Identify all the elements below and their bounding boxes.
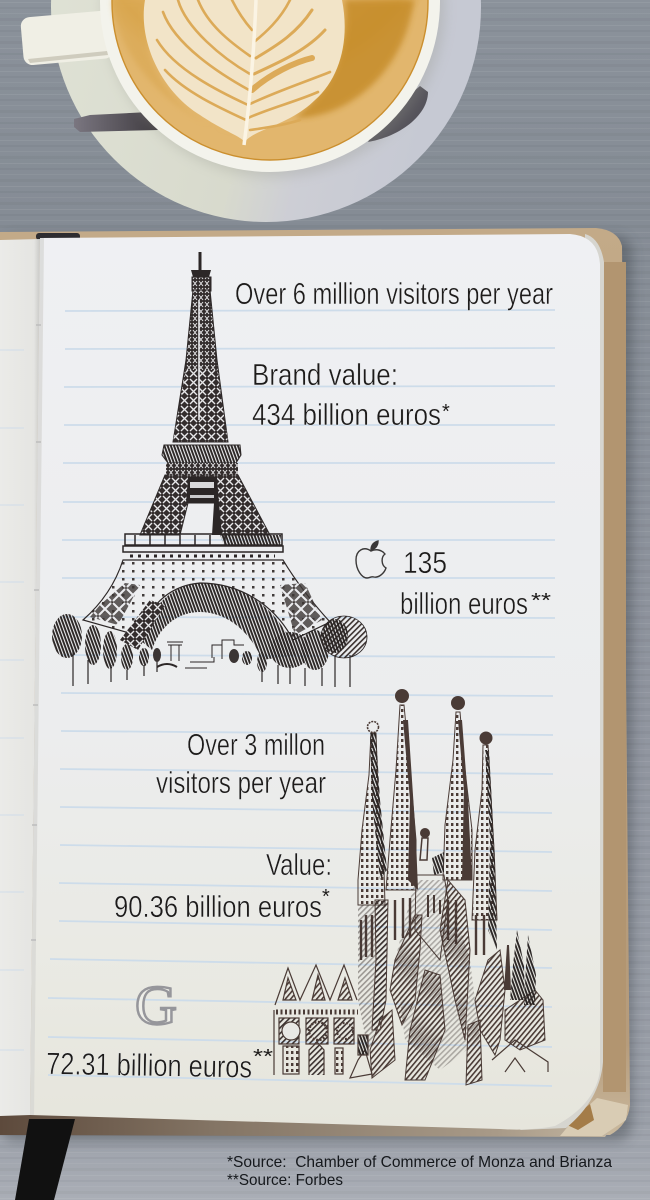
coffee cup on saucer	[20, 0, 481, 222]
cover inner edge	[603, 262, 626, 1092]
bookmark ribbon	[15, 1119, 75, 1200]
text: visitors Barcelona: Over 3 millon	[187, 727, 325, 762]
lower right lattice	[280, 583, 322, 635]
spire 3	[443, 696, 472, 880]
notebook cover	[0, 228, 630, 1135]
icon: apple logo	[356, 541, 386, 578]
text: brand value Paris: 434 billion euros	[252, 397, 441, 432]
small right spires	[504, 930, 536, 1005]
mid section	[140, 475, 270, 535]
lower left lattice	[90, 583, 140, 625]
text: Apple value: billion euros	[400, 586, 528, 621]
trees left	[52, 614, 161, 686]
icon: Google G: G	[135, 975, 177, 1037]
text: visitors Barcelona	[156, 727, 326, 800]
torn corner	[560, 1098, 628, 1136]
cup rim	[100, 0, 440, 172]
coffee edge line	[112, 0, 428, 160]
tower columns	[361, 898, 484, 960]
text: visitors Barcelona: visitors per year	[156, 765, 326, 800]
text: value Barcelona: Value:	[266, 847, 332, 882]
text: brand value Paris	[252, 357, 450, 432]
text: Google value: **	[253, 1046, 273, 1068]
top ribbon stub	[36, 233, 80, 240]
text: Apple value: **	[531, 590, 551, 612]
text: Google value: 72.31 billion euros	[46, 1046, 252, 1085]
cover bottom	[0, 1112, 620, 1137]
cup shadow	[103, 0, 445, 177]
right page	[30, 234, 600, 1130]
ruled lines	[0, 310, 555, 1086]
upper lower lattice	[173, 370, 228, 442]
lower section outline	[83, 560, 330, 640]
darker crema	[295, 0, 414, 118]
text: value Barcelona: *	[322, 886, 330, 908]
left page	[0, 239, 40, 1116]
text: brand value Paris: Brand value:	[252, 357, 398, 392]
second platform	[162, 445, 241, 463]
text: brand value Paris: *	[442, 401, 450, 423]
cup handle	[20, 10, 114, 66]
first platform railing	[123, 534, 283, 556]
stitches	[31, 325, 41, 940]
Eiffel Tower sketch	[52, 252, 367, 687]
upper section	[173, 290, 228, 442]
left building	[274, 965, 372, 1078]
hatched shadows	[358, 905, 388, 1050]
notebook	[0, 228, 632, 1141]
arch hatching	[140, 583, 297, 660]
spire 2	[386, 689, 418, 890]
source notes: *Source: Chamber of Commerce of Monza and Brianza	[227, 1154, 612, 1171]
page edge stack	[520, 234, 604, 1130]
spire 4	[472, 732, 497, 950]
latte art leaf	[144, 0, 345, 145]
Sagrada Familia sketch	[274, 689, 548, 1085]
far buildings	[157, 640, 244, 668]
source notes: **Source: Forbes	[227, 1172, 343, 1189]
antenna and top	[191, 252, 211, 291]
notebook shadow	[0, 236, 632, 1141]
spire 1	[358, 722, 387, 905]
coffee surface	[112, 0, 428, 160]
trees right	[229, 616, 367, 687]
text: value Barcelona	[114, 847, 332, 924]
text: visitors Paris: Over 6 million visitors per year	[235, 276, 553, 311]
spoon	[74, 86, 428, 142]
saucer	[51, 0, 481, 222]
text: Apple value: 135	[403, 545, 447, 580]
source notes	[227, 1154, 612, 1189]
text: value Barcelona: 90.36 billion euros	[114, 889, 322, 924]
page binding shade	[30, 238, 44, 1115]
central statue	[415, 828, 448, 960]
text: Apple value	[400, 545, 551, 621]
